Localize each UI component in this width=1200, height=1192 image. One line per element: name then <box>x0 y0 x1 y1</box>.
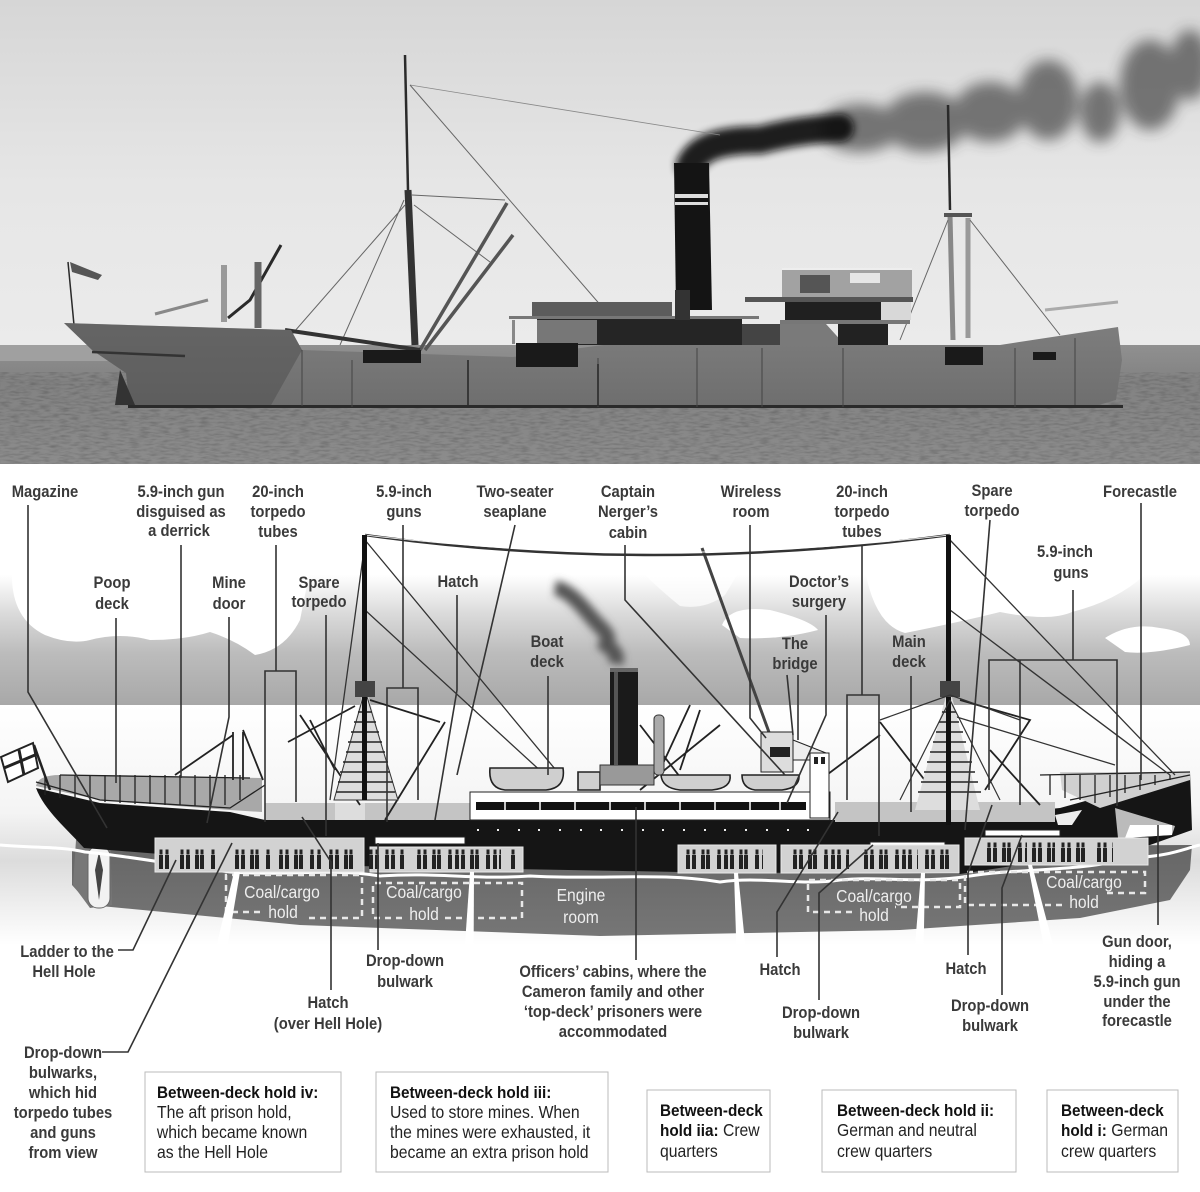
labels: tubes <box>842 523 882 541</box>
fore mast <box>880 535 1020 825</box>
box: hold iv <box>145 1072 341 1172</box>
labels: Magazine <box>12 483 78 501</box>
labels: seaplane <box>483 503 547 521</box>
labels: Nerger’s <box>598 503 658 521</box>
coal/cargo holds: hold <box>268 902 298 922</box>
box: hold iv: which became known <box>156 1122 307 1142</box>
labels: cabin <box>609 524 647 542</box>
coal/cargo holds: hold <box>859 905 889 925</box>
labels: accommodated <box>559 1023 667 1041</box>
box: hold ii: crew quarters <box>837 1141 932 1161</box>
box: hold i: Between-deck <box>1061 1101 1164 1120</box>
box: hold iia: quarters <box>660 1141 718 1161</box>
box: hold i: hold i: German <box>1061 1120 1168 1140</box>
labels: Spare <box>971 482 1013 500</box>
labels: Hatch <box>759 961 801 979</box>
labels: Main <box>892 633 926 651</box>
labels: 20-inch <box>836 483 888 501</box>
funnel <box>674 163 712 310</box>
explanation boxes <box>145 1072 1178 1172</box>
coal/cargo holds: Coal/cargo <box>386 882 462 902</box>
box: hold ii <box>822 1090 1016 1172</box>
labels: torpedo <box>965 502 1020 520</box>
derrick and rigging <box>175 700 1040 820</box>
box: hold iii: the mines were exhausted, it <box>390 1122 591 1142</box>
flag <box>70 262 102 280</box>
box: hold iia: hold iia: Crew <box>660 1120 761 1140</box>
portholes <box>477 829 809 831</box>
labels: deck <box>892 653 926 671</box>
labels: tubes <box>258 523 298 541</box>
labels: bulwark <box>377 973 433 991</box>
labels: guns <box>1053 564 1089 582</box>
labels: 20-inch <box>252 483 304 501</box>
labels: a derrick <box>148 522 210 540</box>
flag <box>1 743 50 790</box>
box: hold i <box>1047 1090 1178 1172</box>
labels: under the <box>1103 993 1171 1011</box>
labels: guns <box>386 503 422 521</box>
box: hold iv: The aft prison hold, <box>157 1102 292 1122</box>
labels: Officers’ cabins, where the <box>519 963 707 981</box>
masts and rigging <box>68 55 1118 350</box>
cutaway ship <box>0 535 1200 936</box>
box: hold iii: Between-deck hold iii: <box>390 1083 551 1102</box>
upper black hull <box>36 772 1192 874</box>
labels: Two-seater <box>477 483 553 501</box>
labels: hiding a <box>1109 953 1165 971</box>
coal/cargo holds: hold <box>1069 892 1099 912</box>
box: hold iia: Between-deck <box>660 1101 763 1120</box>
labels: Wireless <box>721 483 781 501</box>
labels: Hatch <box>307 994 349 1012</box>
coal/cargo holds: Coal/cargo <box>244 882 320 902</box>
labels: bulwark <box>962 1017 1018 1035</box>
bridge <box>761 732 829 818</box>
hull <box>64 323 1122 407</box>
labels: bulwark <box>793 1024 849 1042</box>
coal/cargo holds: hold <box>409 904 439 924</box>
leader lines <box>28 503 1158 1052</box>
smoke plume <box>690 30 1200 165</box>
prisoners <box>159 845 1113 862</box>
labels: Drop-down <box>951 997 1029 1015</box>
labels: Hatch <box>437 573 479 591</box>
box: hold iia <box>647 1090 770 1172</box>
labels: Poop <box>94 574 131 592</box>
labels: Hell Hole <box>32 963 96 981</box>
labels: Cameron family and other <box>522 983 704 1001</box>
box: hold i: crew quarters <box>1061 1141 1156 1161</box>
labels: 5.9-inch <box>1037 543 1093 561</box>
lifeboats <box>490 768 799 790</box>
box: hold iv: as the Hell Hole <box>157 1142 268 1162</box>
labels <box>12 482 1181 1162</box>
labels: which hid <box>28 1084 97 1102</box>
labels: Captain <box>601 483 655 501</box>
labels: from view <box>29 1144 98 1162</box>
box: hold iii: Used to store mines. When <box>390 1102 580 1122</box>
labels: torpedo tubes <box>14 1104 112 1122</box>
pointer wedges <box>186 865 1092 1092</box>
labels: torpedo <box>292 593 347 611</box>
labels: Ladder to the <box>20 943 114 961</box>
labels: 5.9-inch <box>376 483 432 501</box>
box: hold iii <box>376 1072 608 1172</box>
coal/cargo holds <box>226 872 1145 927</box>
labels: bridge <box>772 655 818 673</box>
labels: deck <box>95 595 129 613</box>
boat deck superstructure <box>470 792 830 820</box>
wire between masts <box>365 535 950 555</box>
labels: Drop-down <box>24 1044 102 1062</box>
labels: Drop-down <box>782 1004 860 1022</box>
labels: torpedo <box>251 503 306 521</box>
lower hull <box>72 845 1192 936</box>
labels: Mine <box>212 574 246 592</box>
labels: Spare <box>298 574 340 592</box>
labels: Doctor’s <box>789 573 849 591</box>
labels: and guns <box>30 1124 96 1142</box>
superstructure <box>509 268 913 345</box>
waterline <box>0 845 1200 882</box>
coal/cargo holds: Engine <box>557 885 605 905</box>
labels: Gun door, <box>1102 933 1172 951</box>
labels: door <box>213 595 245 613</box>
well decks <box>265 803 470 820</box>
rudder <box>73 830 112 908</box>
labels: Drop-down <box>366 952 444 970</box>
labels: (over Hell Hole) <box>274 1015 382 1033</box>
labels: 5.9-inch gun <box>1093 973 1181 991</box>
labels: torpedo <box>835 503 890 521</box>
coal/cargo holds: Coal/cargo <box>1046 872 1122 892</box>
coal/cargo holds: room <box>563 907 599 927</box>
box: hold ii: German and neutral <box>837 1120 977 1140</box>
labels: ‘top-deck’ prisoners were <box>524 1003 702 1021</box>
smoke <box>555 588 616 664</box>
aft mast <box>334 535 398 800</box>
photo: ship at sea <box>0 0 1200 464</box>
background: cutaway sky and sea <box>0 464 1200 1192</box>
labels: 5.9-inch gun <box>137 483 225 501</box>
labels: surgery <box>792 593 846 611</box>
funnel <box>600 668 664 785</box>
box: hold ii: Between-deck hold ii: <box>837 1101 994 1120</box>
box: hold iv: Between-deck hold iv: <box>157 1083 318 1102</box>
labels: forecastle <box>1102 1012 1172 1030</box>
labels: bulwarks, <box>29 1064 97 1082</box>
labels: disguised as <box>136 503 226 521</box>
labels: Hatch <box>945 960 987 978</box>
box: hold iii: became an extra prison hold <box>390 1142 588 1162</box>
poop and forecastle rails <box>36 775 262 812</box>
labels: deck <box>530 653 564 671</box>
coal/cargo holds: Coal/cargo <box>836 886 912 906</box>
labels: room <box>733 503 769 521</box>
labels: The <box>782 635 808 653</box>
labels: Forecastle <box>1103 483 1177 501</box>
prison holds <box>155 838 1148 873</box>
labels: Boat <box>531 633 564 651</box>
